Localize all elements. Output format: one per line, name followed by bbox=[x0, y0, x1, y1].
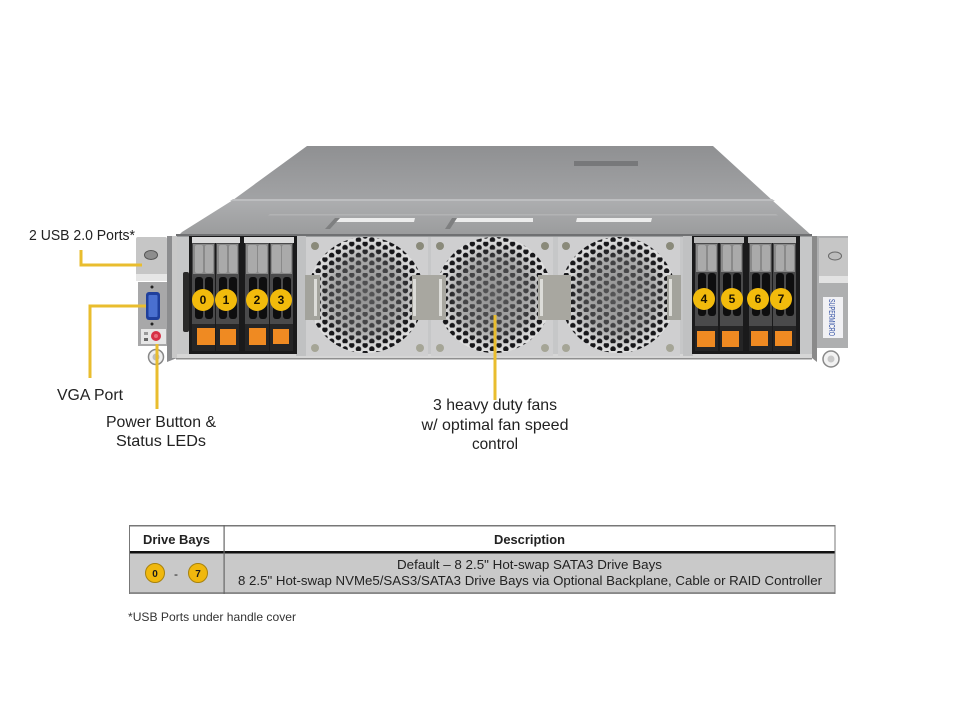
drive 3 bbox=[270, 243, 293, 351]
drive 7 bbox=[773, 243, 796, 351]
callout: power button bbox=[106, 344, 216, 450]
callout: VGA port: VGA Port bbox=[57, 387, 124, 404]
right handle bbox=[812, 236, 848, 367]
left handle bbox=[136, 236, 189, 364]
callout: USB ports bbox=[29, 228, 142, 265]
rear vent bbox=[574, 161, 638, 166]
table header: drive bays: Drive Bays bbox=[143, 532, 210, 547]
badge range bbox=[146, 564, 208, 582]
badge range: - bbox=[174, 567, 178, 581]
drive 4 bbox=[695, 243, 718, 351]
badge 1 bbox=[215, 289, 237, 311]
thumb screw bbox=[148, 350, 164, 364]
footnote: *USB Ports under handle cover bbox=[128, 610, 296, 624]
callout: VGA port bbox=[57, 306, 146, 404]
description text: 8 2.5" Hot-swap NVMe5/SAS3/SATA3 Drive Bays via Optional Backplane, Cable or RAID Controller bbox=[238, 573, 823, 588]
callout: fans: 3 heavy duty fans bbox=[433, 397, 557, 414]
top slots bbox=[325, 218, 652, 229]
left drive bays bbox=[189, 236, 297, 354]
badge 2 bbox=[246, 289, 268, 311]
callout: fans bbox=[420, 315, 568, 453]
Supermicro label: SUPERMICRO bbox=[827, 299, 836, 336]
badge 0: 0 bbox=[200, 293, 207, 307]
front face bbox=[176, 234, 812, 358]
badge 3: 3 bbox=[278, 293, 285, 307]
right drive bays bbox=[692, 236, 800, 354]
badge range: 7 bbox=[195, 569, 201, 580]
chassis mid band bbox=[180, 200, 810, 234]
drive 2 bbox=[245, 243, 269, 351]
chassis top cover bbox=[233, 146, 772, 200]
badge 7 bbox=[770, 288, 792, 310]
USB handle cover bbox=[136, 237, 167, 281]
badge 4: 4 bbox=[701, 292, 708, 306]
callout: fans: w/ optimal fan speed bbox=[420, 417, 568, 434]
badge 0 bbox=[192, 289, 214, 311]
drive 1 bbox=[216, 243, 239, 351]
description text: Default – 8 2.5" Hot-swap SATA3 Drive Bays bbox=[397, 557, 663, 572]
fans bbox=[305, 237, 681, 356]
badge 6: 6 bbox=[755, 292, 762, 306]
badge 3 bbox=[270, 289, 292, 311]
VGA panel bbox=[138, 282, 167, 346]
drive 0 bbox=[192, 243, 215, 351]
fan 2 bbox=[430, 237, 556, 356]
badge 4 bbox=[693, 288, 715, 310]
badge range: 0 bbox=[152, 569, 158, 580]
badge 7: 7 bbox=[778, 292, 785, 306]
fan 1 bbox=[305, 237, 430, 356]
callout: USB ports: 2 USB 2.0 Ports* bbox=[29, 228, 135, 244]
table header: description: Description bbox=[494, 532, 565, 547]
badge 5: 5 bbox=[729, 292, 736, 306]
description text bbox=[238, 557, 823, 588]
callout: power button: Status LEDs bbox=[116, 433, 206, 450]
fan 3 bbox=[556, 237, 681, 356]
server chassis bbox=[176, 146, 812, 360]
badge 5 bbox=[721, 288, 743, 310]
callout: power button: Power Button & bbox=[106, 414, 216, 431]
badge 1: 1 bbox=[223, 293, 230, 307]
callout: fans: control bbox=[472, 436, 518, 453]
drive 5 bbox=[720, 243, 743, 351]
badge 6 bbox=[747, 288, 769, 310]
badge 2: 2 bbox=[254, 293, 261, 307]
drive number badges bbox=[192, 288, 792, 311]
thumb screw bbox=[823, 351, 839, 367]
drive 6 bbox=[749, 243, 772, 351]
drive bays table bbox=[129, 525, 836, 594]
power button and LEDs bbox=[141, 329, 166, 344]
